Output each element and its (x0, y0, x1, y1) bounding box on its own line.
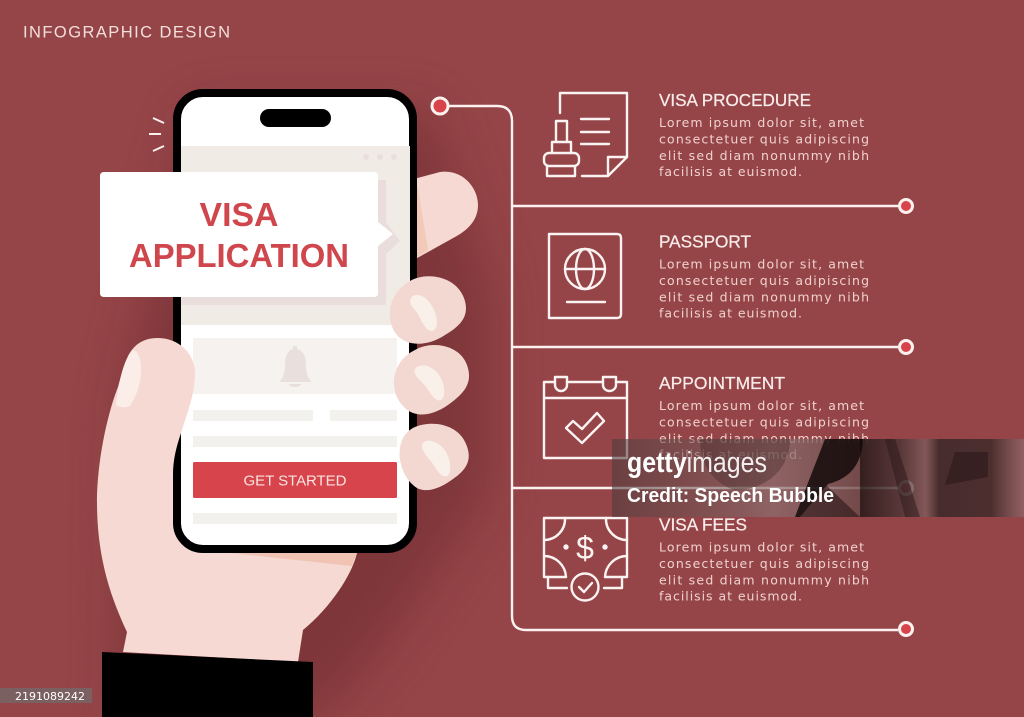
sleeve cuff (102, 652, 313, 717)
phone body (177, 93, 413, 549)
get started button (193, 462, 397, 498)
icon: money with check (544, 518, 627, 600)
text: visa procedure: elit sed diam nonummy nibh (659, 148, 869, 163)
finger three (394, 345, 469, 415)
hand palm (97, 440, 357, 662)
text: visa procedure (659, 90, 869, 179)
notification panel (193, 338, 397, 394)
get started button: GET STARTED (244, 472, 347, 490)
spark marks (149, 118, 164, 151)
text: passport: Lorem ipsum dolor sit, amet (659, 256, 864, 272)
phone (177, 93, 413, 549)
visa application callout (100, 172, 393, 297)
watermark band: gettyimages (627, 447, 767, 479)
text: visa fees: elit sed diam nonummy nibh (659, 572, 869, 588)
text: visa procedure: consectetuer quis adipiscing (659, 132, 869, 146)
icon: money with check: $ (576, 530, 594, 566)
text: appointment: APPOINTMENT (659, 373, 785, 393)
end nodes (900, 200, 912, 636)
watermark band (612, 439, 1024, 517)
text: visa fees: facilisis at euismod. (659, 588, 802, 604)
text: passport (659, 232, 869, 320)
text: passport: elit sed diam nonummy nibh (659, 290, 869, 304)
hand and phone shadow (120, 110, 490, 717)
watermark band: Credit: Speech Bubble (627, 485, 834, 507)
callout shadow (181, 180, 400, 305)
notch (260, 109, 331, 127)
text: appointment: Lorem ipsum dolor sit, amet (659, 398, 864, 413)
icon: calendar (544, 377, 627, 458)
connector lines (432, 98, 898, 630)
top finger behind phone (410, 172, 478, 262)
image id tag (0, 688, 92, 703)
icon: document and stamp (544, 93, 627, 176)
menu dots (363, 154, 397, 160)
fingers (390, 276, 469, 490)
screen header panel (181, 146, 410, 325)
text: visa fees (659, 514, 869, 604)
placeholder bars (193, 410, 397, 524)
icon: passport (549, 234, 621, 318)
text: appointment: facilisis at euismod. (659, 447, 802, 462)
finger four (400, 424, 469, 490)
text: visa procedure: Lorem ipsum dolor sit, amet (659, 115, 864, 130)
title: INFOGRAPHIC DESIGN (23, 24, 230, 42)
text: visa procedure: VISA PROCEDURE (659, 90, 811, 110)
text: visa fees: Lorem ipsum dolor sit, amet (659, 540, 864, 554)
text: visa procedure: facilisis at euismod. (659, 164, 802, 179)
image id tag: 2191089242 (15, 690, 85, 703)
thumb (97, 338, 195, 510)
text: passport: consectetuer quis adipiscing (659, 273, 869, 288)
start node (432, 98, 448, 114)
text: passport: facilisis at euismod. (659, 306, 802, 320)
visa application callout: VISA (200, 196, 278, 233)
text: visa fees: consectetuer quis adipiscing (659, 556, 869, 571)
text: appointment (659, 373, 869, 462)
visa application callout: APPLICATION (129, 237, 349, 274)
text: appointment: consectetuer quis adipiscing (659, 414, 869, 430)
text: passport: PASSPORT (659, 232, 751, 252)
bell icon (280, 346, 311, 387)
finger two (390, 276, 466, 344)
text: visa fees: VISA FEES (659, 514, 747, 534)
palm shade under phone (230, 553, 357, 566)
text: appointment: elit sed diam nonummy nibh (659, 431, 869, 446)
